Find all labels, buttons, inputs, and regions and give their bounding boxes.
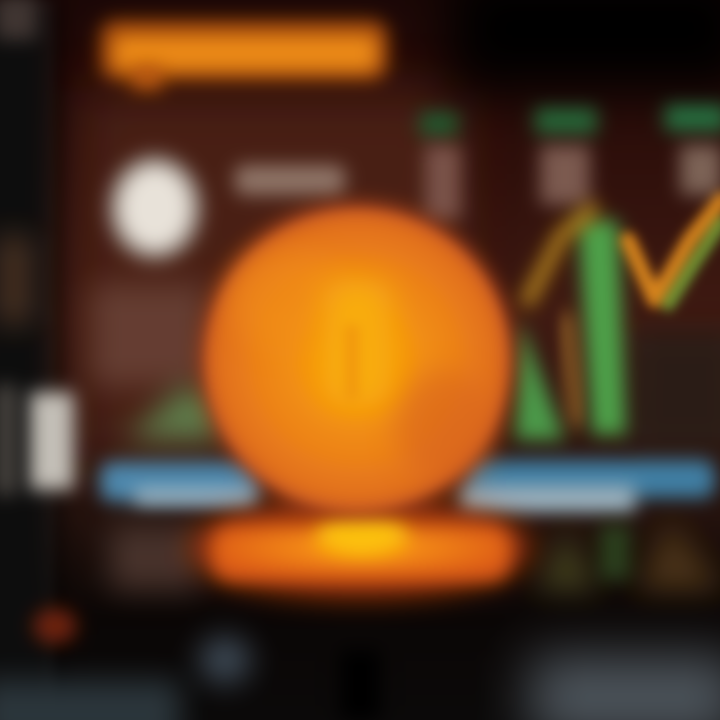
icon: dollar coin: [107, 154, 203, 262]
text block: left paragraph: [92, 285, 207, 385]
glowing orange base: [190, 500, 530, 596]
line chart: green and orange zigzag: [515, 200, 720, 440]
text block: small heading: [235, 165, 345, 195]
lower blurred chart: [110, 520, 720, 590]
bottom floor reflections: [0, 636, 720, 720]
left column blurred panels: [0, 0, 74, 495]
blue horizontal band: [100, 460, 715, 512]
title: [100, 20, 388, 90]
orange dot: [33, 608, 77, 644]
pale blurred columns: [425, 145, 720, 220]
left green area chart: [125, 385, 220, 440]
bitcoin orb: [199, 202, 515, 518]
green column labels: [420, 105, 720, 136]
